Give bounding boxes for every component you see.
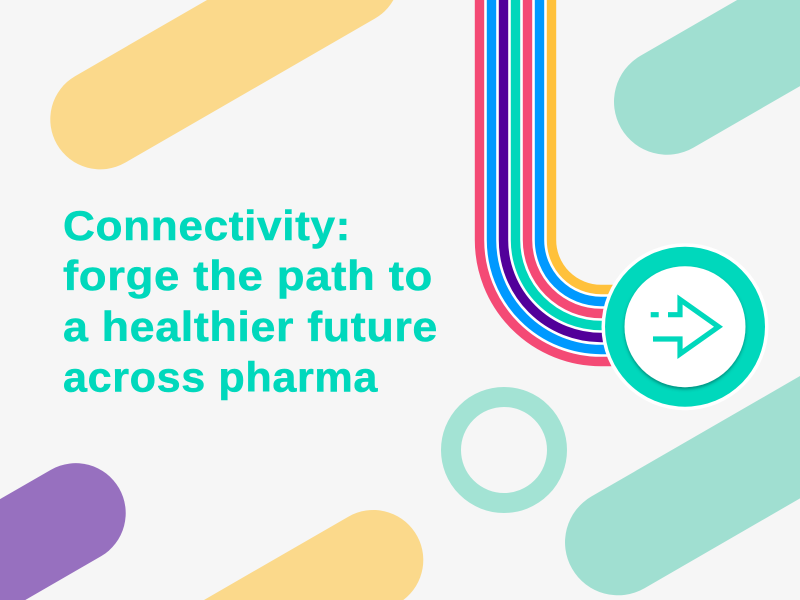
title: forge the path to [63, 252, 433, 299]
teal capsule bottom right [565, 376, 800, 595]
title: a healthier future [63, 303, 438, 350]
purple capsule bottom left [0, 463, 126, 600]
icon: arrow [651, 300, 718, 354]
rainbow connected path [480, 0, 650, 362]
title [63, 202, 438, 400]
title: across pharma [63, 354, 378, 400]
yellow capsule bottom centre [204, 510, 423, 600]
arrow badge [602, 243, 768, 410]
yellow capsule top left [50, 0, 393, 169]
title: Connectivity: [63, 202, 351, 249]
teal capsule top right [614, 0, 800, 155]
teal ring [451, 397, 557, 503]
